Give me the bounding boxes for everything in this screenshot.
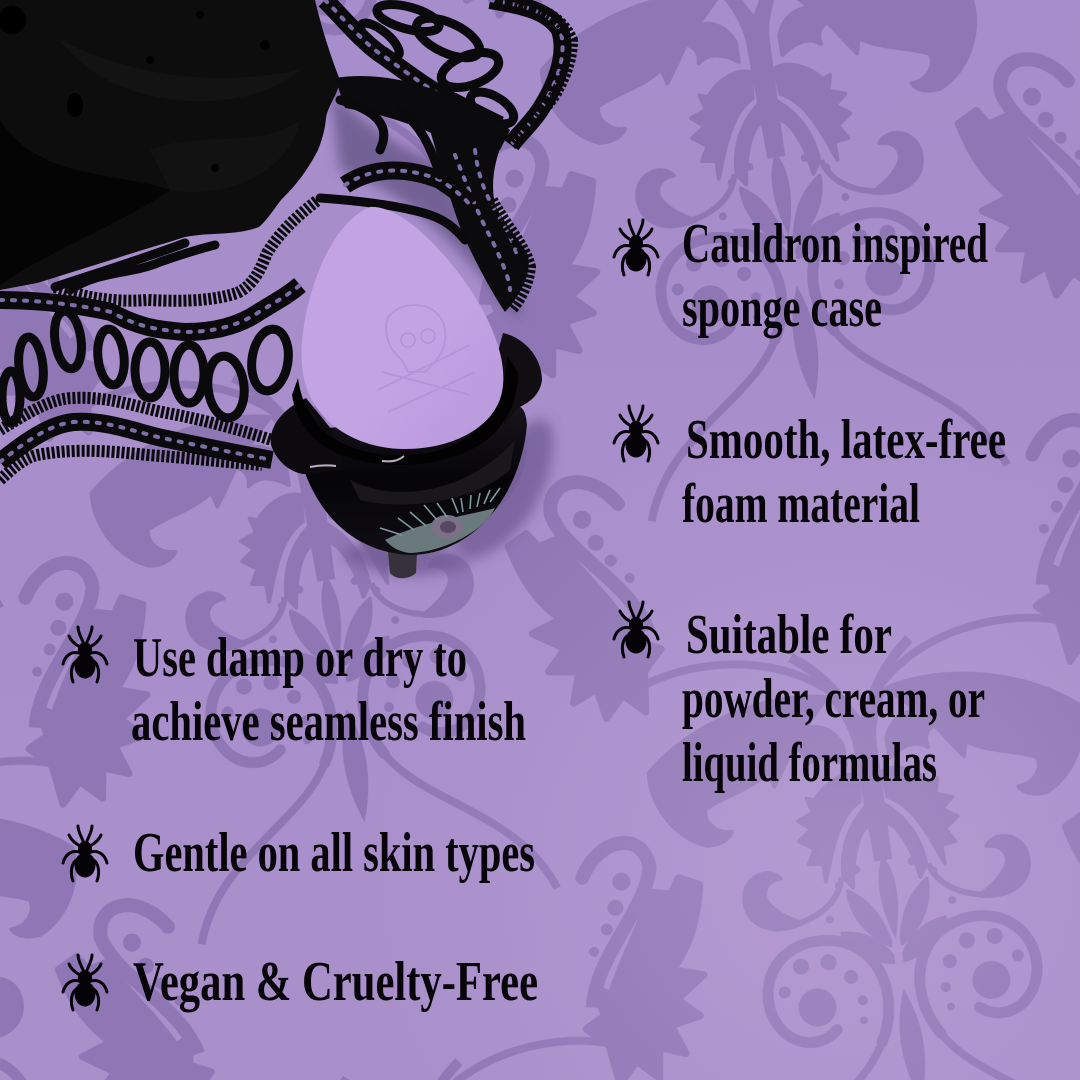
cauldron leg xyxy=(388,552,417,578)
feature: damp or dry: achieve seamless finish xyxy=(131,691,526,753)
feature: latex-free foam xyxy=(614,406,1006,535)
feature: damp or dry xyxy=(63,627,526,753)
fabric drape xyxy=(0,0,340,290)
feature: gentle: Gentle on all skin types xyxy=(133,822,535,884)
lace upper band xyxy=(320,0,572,312)
lace cast shadow xyxy=(330,90,521,320)
feature: vegan: Vegan & Cruelty-Free xyxy=(133,951,538,1013)
feature: suitable formulas xyxy=(614,602,985,794)
cauldron handle right xyxy=(485,333,542,425)
embossed skull and crossbones xyxy=(378,305,475,412)
cauldron body xyxy=(304,406,527,555)
painted eye xyxy=(380,488,500,553)
cauldron handle left xyxy=(271,398,345,474)
feature: damp or dry: Use damp or dry to xyxy=(133,627,467,689)
feature: gentle xyxy=(63,822,535,884)
upper loops xyxy=(356,0,519,130)
feature: latex-free foam: foam material xyxy=(682,473,920,535)
feature: cauldron case xyxy=(614,213,988,339)
feature: suitable formulas: Suitable for xyxy=(686,604,892,666)
cauldron shadow xyxy=(340,420,553,576)
lace lower band xyxy=(0,200,318,480)
left feature list xyxy=(63,627,538,1013)
fabric folds and eyelets xyxy=(0,6,300,285)
right feature list xyxy=(614,213,1006,794)
cauldron xyxy=(271,333,542,578)
beauty sponge xyxy=(302,207,503,449)
feature: suitable formulas: liquid formulas xyxy=(682,732,937,794)
feature: vegan xyxy=(63,951,538,1013)
oval loops xyxy=(2,309,292,423)
feature: cauldron case: sponge case xyxy=(682,277,882,339)
black lace fabric xyxy=(0,0,572,480)
cauldron rim xyxy=(292,355,518,465)
